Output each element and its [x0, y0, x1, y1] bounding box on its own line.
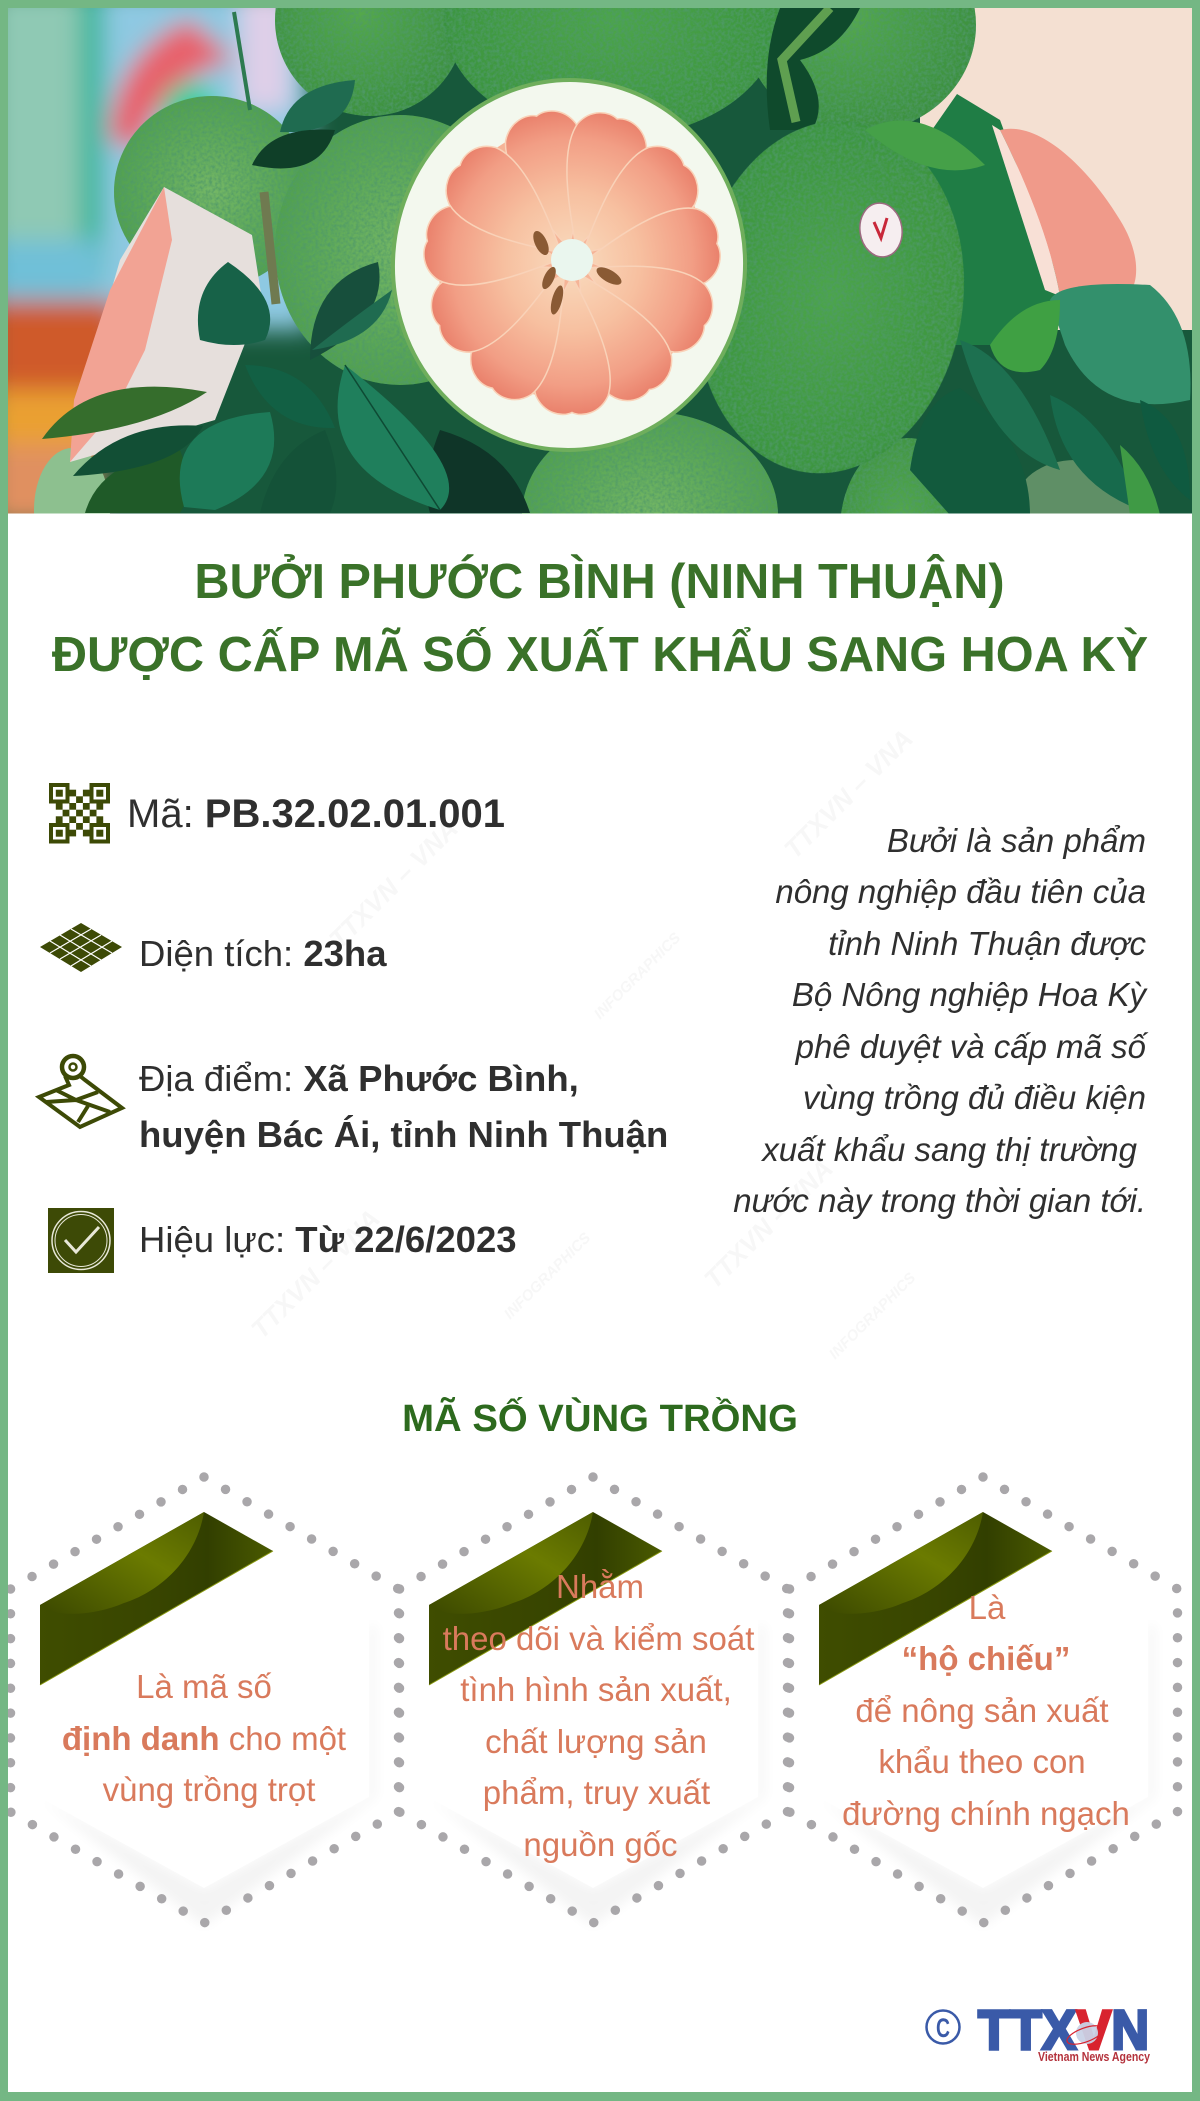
card text 3: “hộ chiếu” [902, 1640, 1070, 1677]
blurred background right [920, 0, 1200, 330]
fruit: big right [708, 120, 964, 474]
leaves [42, 80, 1190, 515]
watermark pattern: INFOGRAPHICS [826, 1269, 919, 1363]
watermark pattern: INFOGRAPHICS [501, 1229, 594, 1323]
description text block [733, 822, 1149, 1219]
icon: copyright [926, 2010, 960, 2044]
agency wordmark: TTXVN [978, 1998, 1149, 2061]
card text 1: định danh cho một [62, 1720, 346, 1757]
card text 2: theo dõi và kiểm soát [443, 1620, 754, 1657]
icon: QR code [49, 783, 110, 844]
location label: huyện Bác Ái, tỉnh Ninh Thuận [139, 1114, 668, 1155]
fruit: cut pomelo [391, 78, 747, 452]
fruit: behind cut [276, 115, 450, 385]
section heading: MÃ SỐ VÙNG TRỒNG [402, 1395, 798, 1440]
info row: code [49, 783, 505, 844]
validity label: Hiệu lực: Từ 22/6/2023 [139, 1219, 517, 1260]
description text block: nông nghiệp đầu tiên của [775, 873, 1146, 910]
hero photo: pomelos with leaves [8, 8, 1192, 514]
description text block: vùng trồng đủ điều kiện [803, 1079, 1146, 1116]
card text 2: tình hình sản xuất, [460, 1671, 732, 1708]
blurred background left [0, 0, 310, 525]
code label: Mã: PB.32.02.01.001 [127, 792, 505, 836]
hexagon and ribbon 3 [790, 1477, 1178, 1926]
stems [782, 8, 830, 122]
hexagon card 3 [790, 1477, 1178, 1926]
logo: TTXVN copyright [926, 1998, 1151, 2064]
location label: Địa điểm: Xã Phước Bình, [139, 1058, 579, 1099]
hexagon and ribbon 2 [400, 1477, 788, 1926]
fruit: right dark slice and pink slice [925, 94, 1070, 345]
watermark pattern [245, 724, 919, 1363]
info row: validity [48, 1208, 517, 1273]
icon: field grid [40, 923, 122, 972]
hexagon card 1 [10, 1477, 398, 1926]
card text 1 [62, 1668, 346, 1808]
watermark pattern: TTXVN – VNA [323, 814, 464, 954]
card text 2: chất lượng sản [485, 1723, 707, 1760]
icon: globe [1065, 2022, 1105, 2048]
agency tagline: Vietnam News Agency [1038, 2049, 1151, 2064]
info row: location [39, 1056, 668, 1155]
card text 2: nguồn gốc [523, 1826, 678, 1863]
description text block: xuất khẩu sang thị trường [760, 1131, 1138, 1168]
card text 3: để nông sản xuất [855, 1692, 1109, 1729]
icon: copyright: C [936, 2013, 950, 2043]
info row: area [40, 923, 387, 974]
watermark pattern: INFOGRAPHICS [591, 929, 684, 1023]
description text block: nước này trong thời gian tới. [733, 1182, 1146, 1219]
card text 2: phẩm, truy xuất [483, 1774, 710, 1811]
title [52, 554, 1148, 682]
card text 3: Là [969, 1589, 1006, 1626]
location label [139, 1058, 668, 1155]
watermark pattern: TTXVN – VNA [778, 724, 919, 864]
card text 3 [842, 1589, 1130, 1832]
card text 3: đường chính ngạch [842, 1795, 1130, 1832]
card text 2 [443, 1568, 754, 1863]
hexagon card 2 [400, 1477, 788, 1926]
fruit: left wedge [70, 187, 262, 462]
description text block: Bộ Nông nghiệp Hoa Kỳ [792, 976, 1148, 1013]
icon: map pin [39, 1056, 122, 1127]
description text block: Bưởi là sản phẩm [887, 822, 1146, 859]
card text 2: Nhằm [556, 1568, 644, 1605]
card text 1: Là mã số [136, 1668, 272, 1705]
fruit: bottom row [34, 448, 110, 514]
icon: check badge [48, 1208, 114, 1273]
description text block: phê duyệt và cấp mã số [795, 1028, 1149, 1065]
fruit: back row [275, 8, 456, 116]
hexagon and ribbon 1 [10, 1477, 398, 1926]
card text 1: vùng trồng trọt [103, 1771, 315, 1808]
title: ĐƯỢC CẤP MÃ SỐ XUẤT KHẨU SANG HOA KỲ [52, 627, 1148, 682]
description text block: tỉnh Ninh Thuận được [828, 925, 1146, 962]
dark leaves behind stem [767, 8, 860, 130]
fruit sticker [859, 202, 903, 258]
title: BƯỞI PHƯỚC BÌNH (NINH THUẬN) [194, 554, 1005, 609]
area label: Diện tích: 23ha [139, 933, 387, 974]
card text 3: khẩu theo con [878, 1743, 1086, 1780]
watermark pattern: TTXVN – VNA [698, 1154, 839, 1294]
watermark pattern: TTXVN – VNA [245, 1204, 386, 1344]
